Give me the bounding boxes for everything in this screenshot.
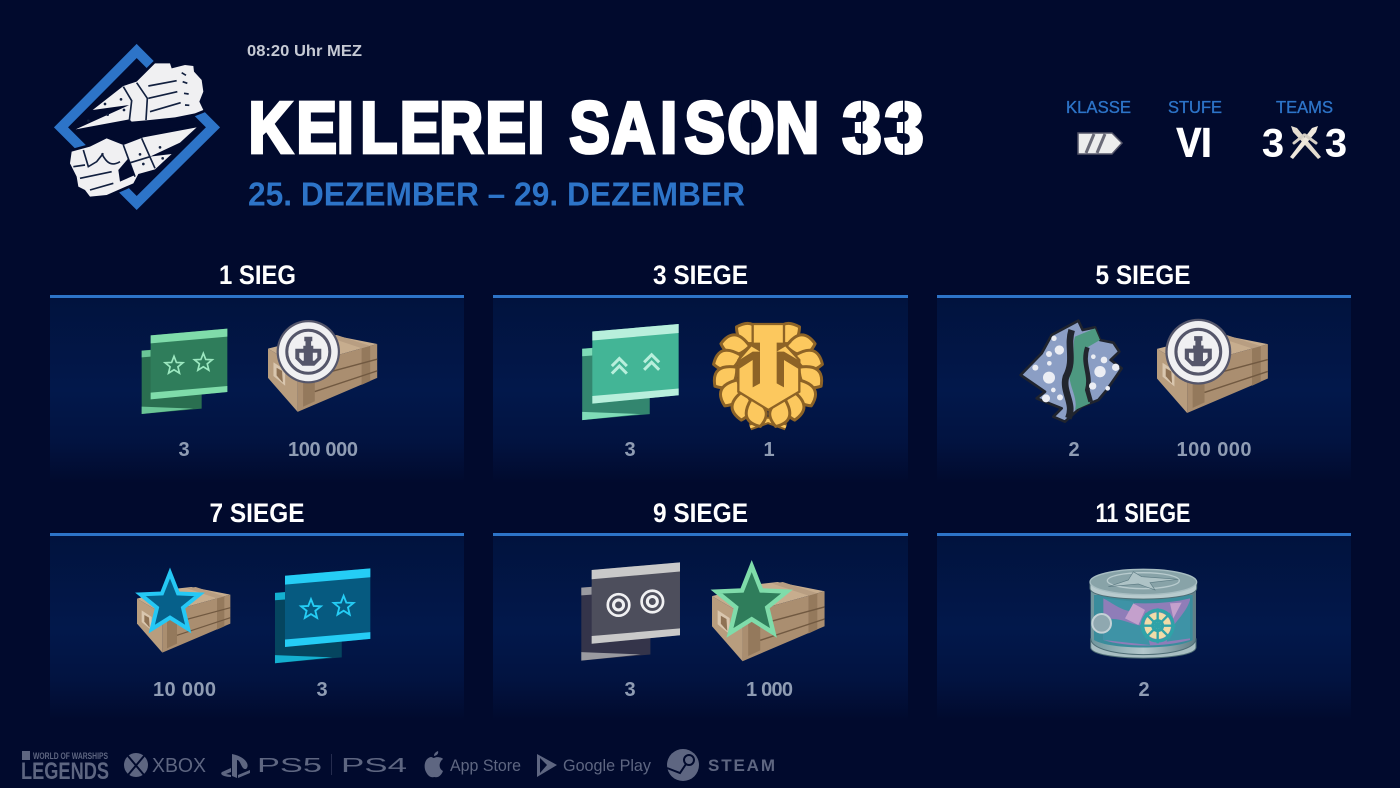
heading: 3 SIEGE	[653, 260, 748, 290]
logo: Xbox: XBOX	[152, 755, 206, 777]
value: 1 000	[746, 679, 793, 701]
icon: lower gauntlet	[70, 127, 197, 197]
panel: 5 Siege	[937, 260, 1351, 483]
logo: crossed gauntlets in blue diamond	[61, 51, 213, 203]
value: 100 000	[1176, 439, 1252, 461]
info: class	[1066, 97, 1131, 154]
value: 2	[1138, 679, 1150, 701]
value: 3	[624, 679, 636, 701]
logo: Google Play: Google Play	[563, 756, 651, 775]
panel: 7 Siege	[50, 498, 464, 721]
info: class: KLASSE	[1066, 97, 1131, 117]
icon: upper gauntlet	[76, 63, 203, 129]
info: tier: VI	[1176, 120, 1212, 166]
panel: 3 Siege	[493, 260, 908, 483]
info: teams: TEAMS	[1276, 97, 1333, 117]
logo: App Store	[425, 751, 521, 777]
icon: green star flags	[142, 329, 227, 414]
heading: 1 SIEG	[219, 260, 296, 290]
icon: camouflage	[1021, 321, 1122, 422]
icon: credits crate	[1157, 319, 1268, 413]
logo: PlayStation 5 and 4: PS4	[341, 755, 407, 777]
icon: grey coin flags	[581, 562, 680, 661]
logo: World of Warships Legends: LEGENDS	[21, 758, 109, 785]
value: 100 000	[288, 439, 358, 461]
logo: Xbox	[124, 753, 206, 777]
logo: PlayStation 5 and 4: PS5	[257, 755, 322, 777]
info: teams	[1262, 97, 1347, 166]
panel: 1 Sieg	[50, 260, 464, 483]
subtitle: dates: 25. DEZEMBER – 29. DEZEMBER	[248, 176, 745, 212]
heading: 7 SIEGE	[210, 498, 304, 528]
value: 3	[178, 439, 190, 461]
panel: 11 Siege	[937, 498, 1351, 721]
footer: platform logos	[21, 749, 775, 785]
value: 3	[624, 439, 636, 461]
icon: blue diamond frame	[61, 51, 213, 203]
value: 10 000	[153, 679, 216, 701]
icon: teal chevron flags	[582, 324, 679, 420]
icon: destroyer class	[1078, 133, 1122, 154]
logo: World of Warships Legends: WORLD OF WARSHIPS	[33, 751, 108, 761]
heading: 5 SIEGE	[1096, 260, 1190, 290]
panel: 9 Siege	[493, 498, 908, 721]
logo: Steam: STEAM	[708, 756, 775, 775]
info: tier	[1168, 97, 1222, 166]
heading: 11 SIEGE	[1096, 498, 1190, 528]
value: 1	[763, 439, 775, 461]
logo: App Store: App Store	[450, 756, 521, 775]
title: 33	[842, 88, 924, 168]
time label: 08:20 Uhr MEZ	[247, 43, 362, 60]
logo: Steam	[667, 749, 775, 781]
info: teams: 3	[1262, 122, 1284, 166]
info: tier: STUFE	[1168, 97, 1222, 117]
icon: credits crate	[268, 320, 377, 412]
info: teams: 3	[1325, 122, 1347, 166]
value: 2	[1068, 439, 1080, 461]
icon: crate with green star	[712, 566, 825, 661]
logo: World of Warships Legends	[21, 751, 109, 785]
icon: gold wreath medal	[708, 318, 828, 430]
value: 3	[316, 679, 328, 701]
icon: crossed swords	[1290, 126, 1321, 159]
logo: Google Play	[537, 754, 651, 777]
icon: crate with blue star	[137, 573, 230, 653]
logo: PlayStation 5 and 4	[221, 754, 407, 778]
title: KEILEREI SAISON	[249, 89, 819, 169]
icon: holiday container	[1090, 569, 1197, 658]
heading: 9 SIEGE	[653, 498, 748, 528]
icon: blue star flags	[275, 568, 370, 663]
